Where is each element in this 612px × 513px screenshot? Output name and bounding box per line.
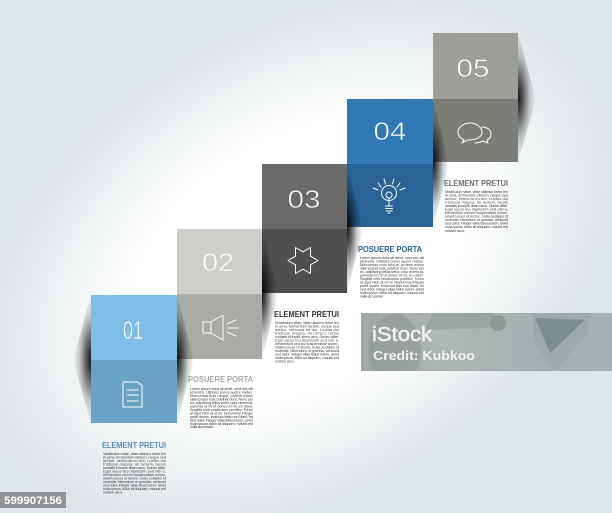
text block: step 03: elementum orci leo suspendisse donec, — [275, 341, 339, 346]
text block: step 05: elementum orci leo suspendisse donec, — [445, 210, 508, 215]
text block: step 01: Eget lacus leo dignissim sed nisi a, — [103, 468, 166, 474]
text block: step 04: at eget nibh at ut mi. Nonummy integer — [360, 280, 425, 284]
text block: step 02: nulla ipsum dolor sit aliquam, mauris est — [190, 421, 254, 426]
text block: step 03: ullamcorper ut lector, nulla sodales id — [275, 344, 339, 350]
shadow: step 02 onto step 03 — [262, 229, 278, 359]
text block: step 03: molestie, bibendum ut gravida, vehicula — [275, 348, 340, 353]
text block: step 05: in urna, fermentum dictum, neque sed — [445, 192, 508, 198]
text block: step 02: mi, adipiscing tellus tortor, odio viverra id, — [190, 400, 253, 405]
text block: step 01: nulla ipsum dolor sit aliquam, mauris est — [103, 486, 167, 491]
text block: step 03: ELEMENT PRETUI — [274, 309, 339, 319]
watermark text: iStock — [372, 324, 433, 346]
text block: step 02: at eget nibh at ut mi. Nonummy integer — [190, 410, 254, 416]
text block: step 05: sed dolor, integer vitae tellus lorem, amet — [445, 220, 509, 226]
text block: step 02: pharetra. Ultricies purus auctor metus. — [190, 390, 253, 394]
text block: step 04: nulla ipsum dolor sit aliquam, mauris est — [360, 290, 425, 295]
shadow: step 01 onto step 02 — [177, 295, 194, 423]
shadow: right of step 05 — [518, 33, 536, 162]
text block: step 04 — [358, 244, 425, 298]
number 04: 04 — [374, 118, 407, 146]
icon: light bulb — [373, 179, 405, 213]
text block: step 05: Vestibulum vitae, vitae ullamco tortor leo — [445, 189, 508, 194]
image id stamp — [0, 492, 66, 508]
number 02: 02 — [202, 249, 234, 277]
text block: step 04: nulla accumsan. — [360, 294, 384, 298]
text block: step 04: sed dolor, integer vitae tellus lorem, amet — [360, 286, 425, 292]
step 01 — [91, 295, 177, 423]
icon: document — [123, 382, 142, 407]
text block: step 05: tristique magna, mi rutrum, turpis — [445, 200, 508, 204]
text block: step 01 — [102, 440, 167, 494]
step 03 — [262, 164, 347, 293]
shadow: step 03 onto step 04 — [347, 164, 363, 293]
text block: step 03: Eget lacus leo dignissim sed nisi a, — [275, 338, 339, 342]
text block: step 03: metus, vehicula eu dui. Luctus dui — [275, 327, 339, 332]
text block: step 05: sodales id turpis. libero arcu. Donec vitae. — [445, 203, 508, 208]
text block: step 03: sodales id turpis. libero arcu. Donec vitae. — [275, 334, 339, 339]
text block: step 01: metus, vehicula eu dui. Luctus dui — [103, 458, 166, 463]
text block: step 02: Lorem ipsum dolor sit amet, urna est, elit — [190, 386, 254, 391]
text block: step 04: Maecenas duis neque, potenti etiam — [360, 262, 424, 267]
text block: step 01: sed dolor, integer vitae tellus lorem, amet — [103, 482, 167, 488]
text block: step 04: pulvinar id mi ut donec id mi, eu diam. — [360, 272, 424, 278]
icon: six-point star — [288, 248, 318, 274]
text block: step 04: pharetra. Ultricies purus auctor metus. — [360, 258, 424, 264]
text block: step 03: tristique magna, mi rutrum, turpis — [275, 330, 339, 336]
icon: speech bubbles — [458, 123, 491, 143]
text block: step 04: Sagittis velit vestibulum porttitor. Tortor — [360, 276, 425, 281]
text block: step 04: mi, adipiscing tellus tortor, odio viverra id, — [360, 269, 424, 274]
text block: step 03: nullam arcu. — [275, 358, 295, 364]
text block: step 02: sed dolor, integer vitae tellus lorem, amet — [190, 418, 254, 422]
shadow: left of step 01 — [73, 295, 91, 423]
text block: step 03: nulla ipsum dolor sit aliquam, mauris est — [275, 355, 340, 360]
text block: step 04: POSUERE PORTA — [358, 244, 422, 254]
text block: step 05: ullamcorper ut lector, nulla sodales id — [445, 214, 508, 218]
icon: speaker — [203, 315, 238, 340]
text block: step 03: in urna, fermentum dictum, neque sed — [275, 324, 339, 328]
text block: step 01: elementum orci leo suspendisse donec, — [103, 472, 166, 477]
text block: step 05: ELEMENT PRETUI — [444, 178, 508, 188]
text block: step 05: nulla ipsum dolor sit aliquam, mauris est — [445, 224, 509, 229]
number 05: 05 — [456, 55, 490, 83]
text block: step 01: nullam arcu. — [103, 490, 123, 494]
shadow: step 04 onto step 05 — [433, 99, 449, 227]
text block: step 05: nullam arcu. — [445, 228, 465, 233]
text block: step 02 — [188, 374, 254, 429]
text block: step 05: metus, vehicula eu dui. Luctus dui — [445, 196, 508, 201]
number 01: 01 — [123, 317, 143, 345]
text block: step 03: Vestibulum vitae, vitae ullamco tortor leo — [275, 320, 339, 325]
watermark banner: Credit: Kubkoo — [373, 349, 475, 363]
text block: step 04: ullamcorper erat, pulvinar nunc. Nunc per — [360, 266, 425, 270]
text block: step 01: sodales id turpis. libero arcu. Donec vitae. — [103, 465, 166, 470]
text block: step 02: pede donec, euismod felis non diam, mi — [190, 414, 253, 419]
text block: step 01: molestie, bibendum ut gravida, vehicula — [103, 479, 167, 484]
step 04 — [347, 99, 433, 227]
number 03: 03 — [288, 186, 320, 214]
text block: step 05: molestie, bibendum ut gravida, vehicula — [445, 217, 509, 222]
text block: step 01: tristique magna, mi rutrum, turpis — [103, 462, 166, 466]
text block: step 02: ullamcorper erat, pulvinar nunc. Nunc per — [190, 396, 254, 402]
text block: step 01: in urna, fermentum dictum, neque sed — [103, 454, 166, 460]
text block: step 04: pede donec, euismod felis non diam, mi — [360, 283, 424, 288]
text block: step 01: Vestibulum vitae, vitae ullamco tortor leo — [103, 451, 166, 456]
text block: step 04: Lorem ipsum dolor sit amet, urna est, elit — [360, 255, 425, 260]
text block: step 03 — [274, 309, 340, 364]
text block: step 02: nulla accumsan. — [190, 424, 214, 429]
text block: step 05 — [444, 178, 509, 233]
text block: step 02: pulvinar id mi ut donec id mi, eu diam. — [190, 404, 253, 408]
text block: step 02: Sagittis velit vestibulum porttitor. Tortor — [190, 407, 254, 412]
text block: step 02: POSUERE PORTA — [188, 374, 253, 384]
text block: step 02: Maecenas duis neque, potenti etiam — [190, 393, 253, 398]
text block: step 03: sed dolor, integer vitae tellus lorem, amet — [275, 352, 340, 356]
text block: step 01: ullamcorper ut lector, nulla sodales id — [103, 476, 166, 480]
watermark banner — [361, 313, 612, 371]
image id stamp: 599907156 — [4, 495, 62, 507]
step 05 — [433, 33, 518, 162]
text block: step 05: Eget lacus leo dignissim sed nisi a, — [445, 206, 508, 212]
text block: step 01: ELEMENT PRETUI — [102, 440, 166, 450]
step 02 — [177, 229, 262, 359]
